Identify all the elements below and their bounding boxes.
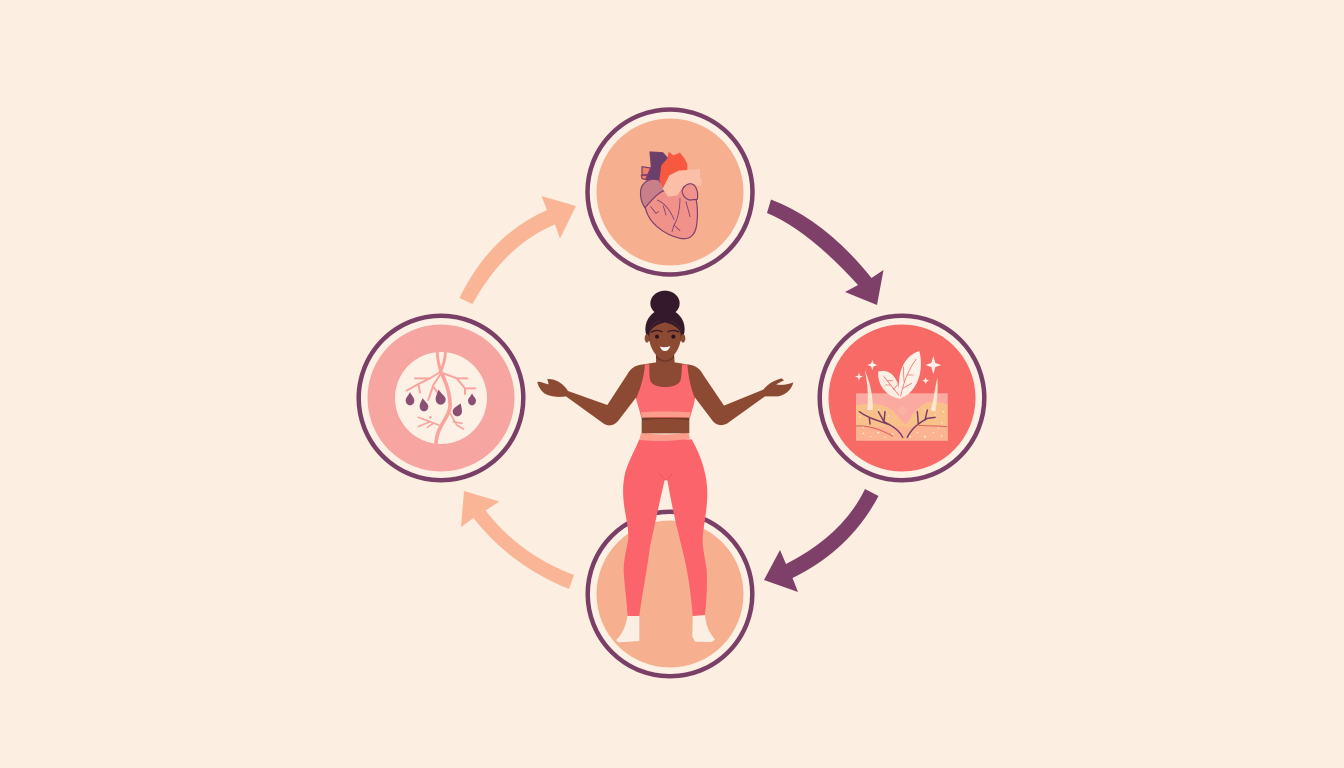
panel: vessels circle [359,316,523,480]
fine red vessels [856,425,947,436]
leggings [623,439,707,616]
arms and torso skin [537,353,793,433]
icon: anatomical heart [641,152,702,239]
hair follicles [865,370,873,410]
eyebrows [651,330,679,332]
figure upper body [537,291,793,433]
sparkles [855,356,941,384]
panel: skin circle [820,316,984,480]
arrow: right to bottom [764,489,878,592]
hair fringe [649,320,681,335]
smile [660,346,670,351]
icon: skin layers with leaves [855,351,948,441]
arrow: top to right [767,200,884,305]
figure: woman with open arms [537,291,793,642]
skin speckles [859,409,944,438]
arrow: bottom to left [461,491,574,589]
face [649,320,681,360]
left sock [616,615,639,642]
panel: heart circle [588,110,752,274]
icon: branching vessels with droplets [406,353,476,443]
waistband [639,433,690,441]
midriff shadow [642,418,689,420]
blood vessels [859,410,935,437]
crease [658,473,673,480]
hair [645,291,685,349]
leaves [878,371,900,399]
panel: bottom circle [588,512,752,676]
arrow: left to top [460,196,576,304]
figure lower body [616,433,715,642]
ears [645,334,685,343]
sports bra [636,364,695,418]
eyes [655,335,675,339]
neck shadow [656,353,674,362]
bra band [641,411,691,418]
right sock [692,615,715,642]
